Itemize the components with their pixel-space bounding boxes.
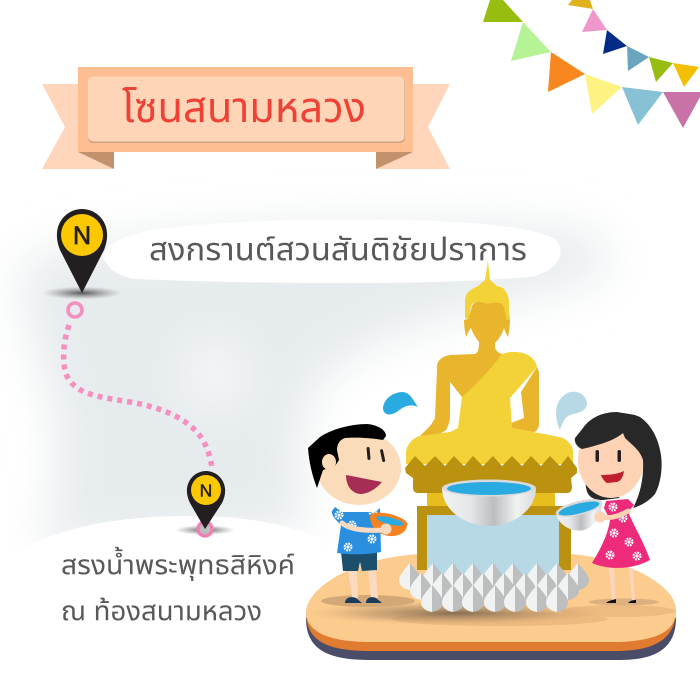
girl eyes [596,450,621,462]
destination label second line: ณ ท้องสนามหลวง [61,596,262,626]
girl character [554,412,662,606]
buddha statue [405,261,577,575]
start label text: สงกรานต์สวนสันติชัยปราการ [149,232,527,267]
girl back hair [586,475,620,500]
title text: โซนสนามหลวง [122,84,366,131]
boy mouth [346,475,382,494]
girl flowers [607,504,640,559]
boy shoes [345,597,382,603]
girl hair [575,412,662,508]
boy shorts [341,552,377,571]
destination label text: สรงน้ำพระพุทธสิหิงค์ [61,546,295,581]
map pin: start [42,209,122,300]
boy legs [348,570,378,598]
boy character [308,424,415,607]
statue base [405,456,577,493]
statue crown [465,261,510,320]
boy eyes [366,447,385,462]
girl mouth [601,471,624,483]
statue robe [406,352,573,464]
boy flowers [336,509,376,550]
boy shirt [332,507,381,554]
bunting flags [483,0,700,128]
platform shadows [305,601,675,626]
background haze [20,225,610,550]
large water bowl [442,480,536,526]
boy ear [322,454,336,470]
start label bubble [103,220,561,283]
map pin: start: N [73,222,91,250]
statue right arm [511,367,539,432]
dotted route [64,303,212,470]
boy hair [308,424,386,488]
bottom label hill [0,516,330,700]
map pin: destination [175,471,235,536]
girl bowl [556,503,602,531]
title ribbon [42,67,450,169]
water drop: blue [383,392,418,414]
girl legs [609,568,635,601]
girl dress [592,499,650,568]
boy arm [342,523,384,530]
water drop: light blue [556,392,587,430]
platform [305,554,676,660]
girl shoes [606,599,636,603]
boy bowl [370,516,407,536]
girl arm [600,511,628,518]
map pin: destination: N [200,480,212,500]
boy head [317,431,401,505]
statue body dark [420,301,510,436]
lotus spikes [399,563,589,612]
girl head [578,422,644,498]
